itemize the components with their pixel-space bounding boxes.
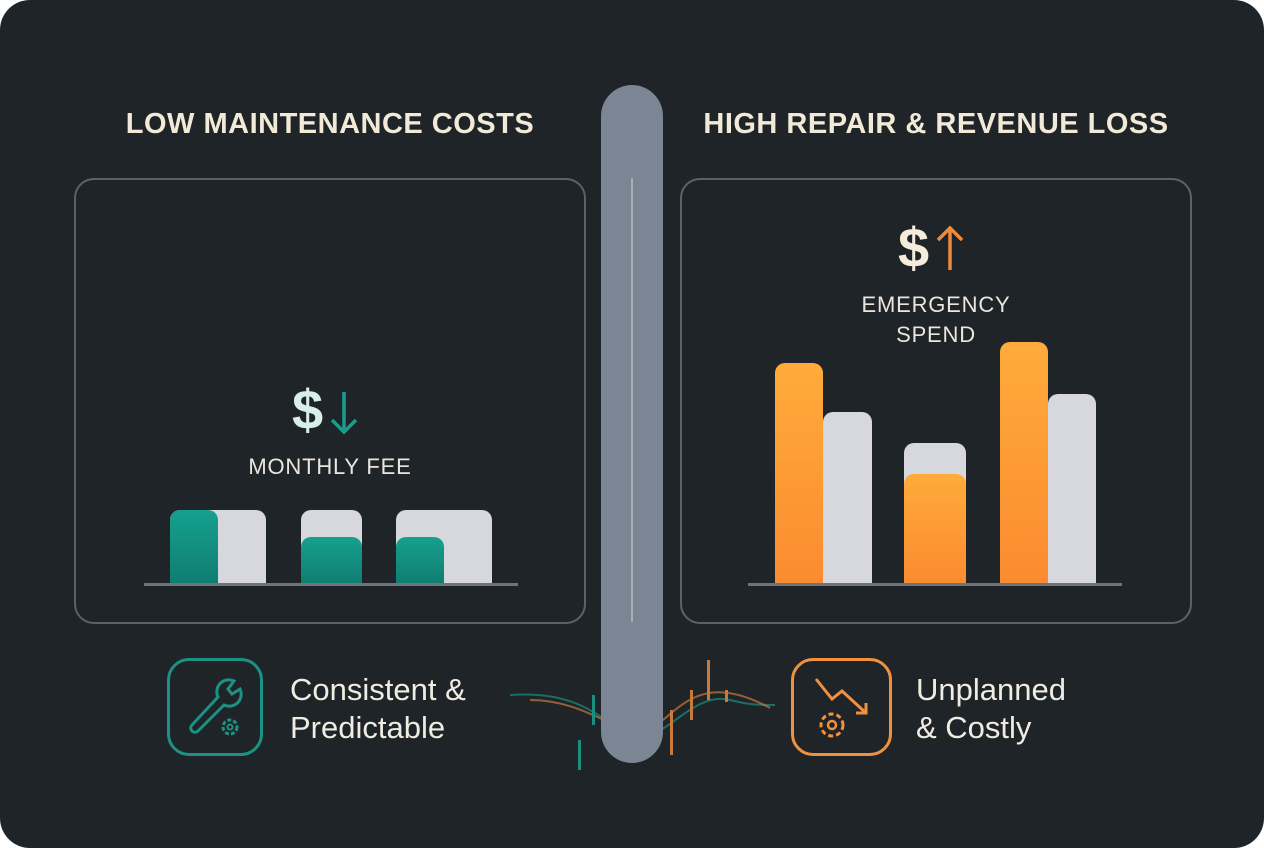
caption: consistent: Predictable [290,710,445,745]
caption: unplanned: Unplanned [916,672,1066,707]
icon: gear down [791,658,892,756]
icon: dollar up: $ [898,216,929,279]
icon: dollar down: $ [292,378,323,441]
caption: consistent: Consistent & [290,672,466,707]
heading: right: HIGH REPAIR & REVENUE LOSS [703,108,1169,140]
heading: left: LOW MAINTENANCE COSTS [126,108,534,140]
label: emergency spend [862,292,1010,347]
icon: dollar down [292,378,358,441]
label: monthly fee: MONTHLY FEE [248,454,412,479]
icon: dollar up [898,216,964,279]
icon: wrench gear [167,658,263,756]
decoration: wave connector [510,660,775,770]
caption: unplanned: & Costly [916,710,1031,745]
panel: right chart [680,178,1192,624]
panel: left chart [74,178,586,624]
bar chart: right [748,342,1122,586]
label: emergency spend: EMERGENCY [862,292,1010,317]
bar chart: left [144,510,518,586]
label: emergency spend: SPEND [896,322,976,347]
divider pill [601,85,663,763]
caption: unplanned [916,672,1066,745]
caption: consistent [290,672,466,745]
